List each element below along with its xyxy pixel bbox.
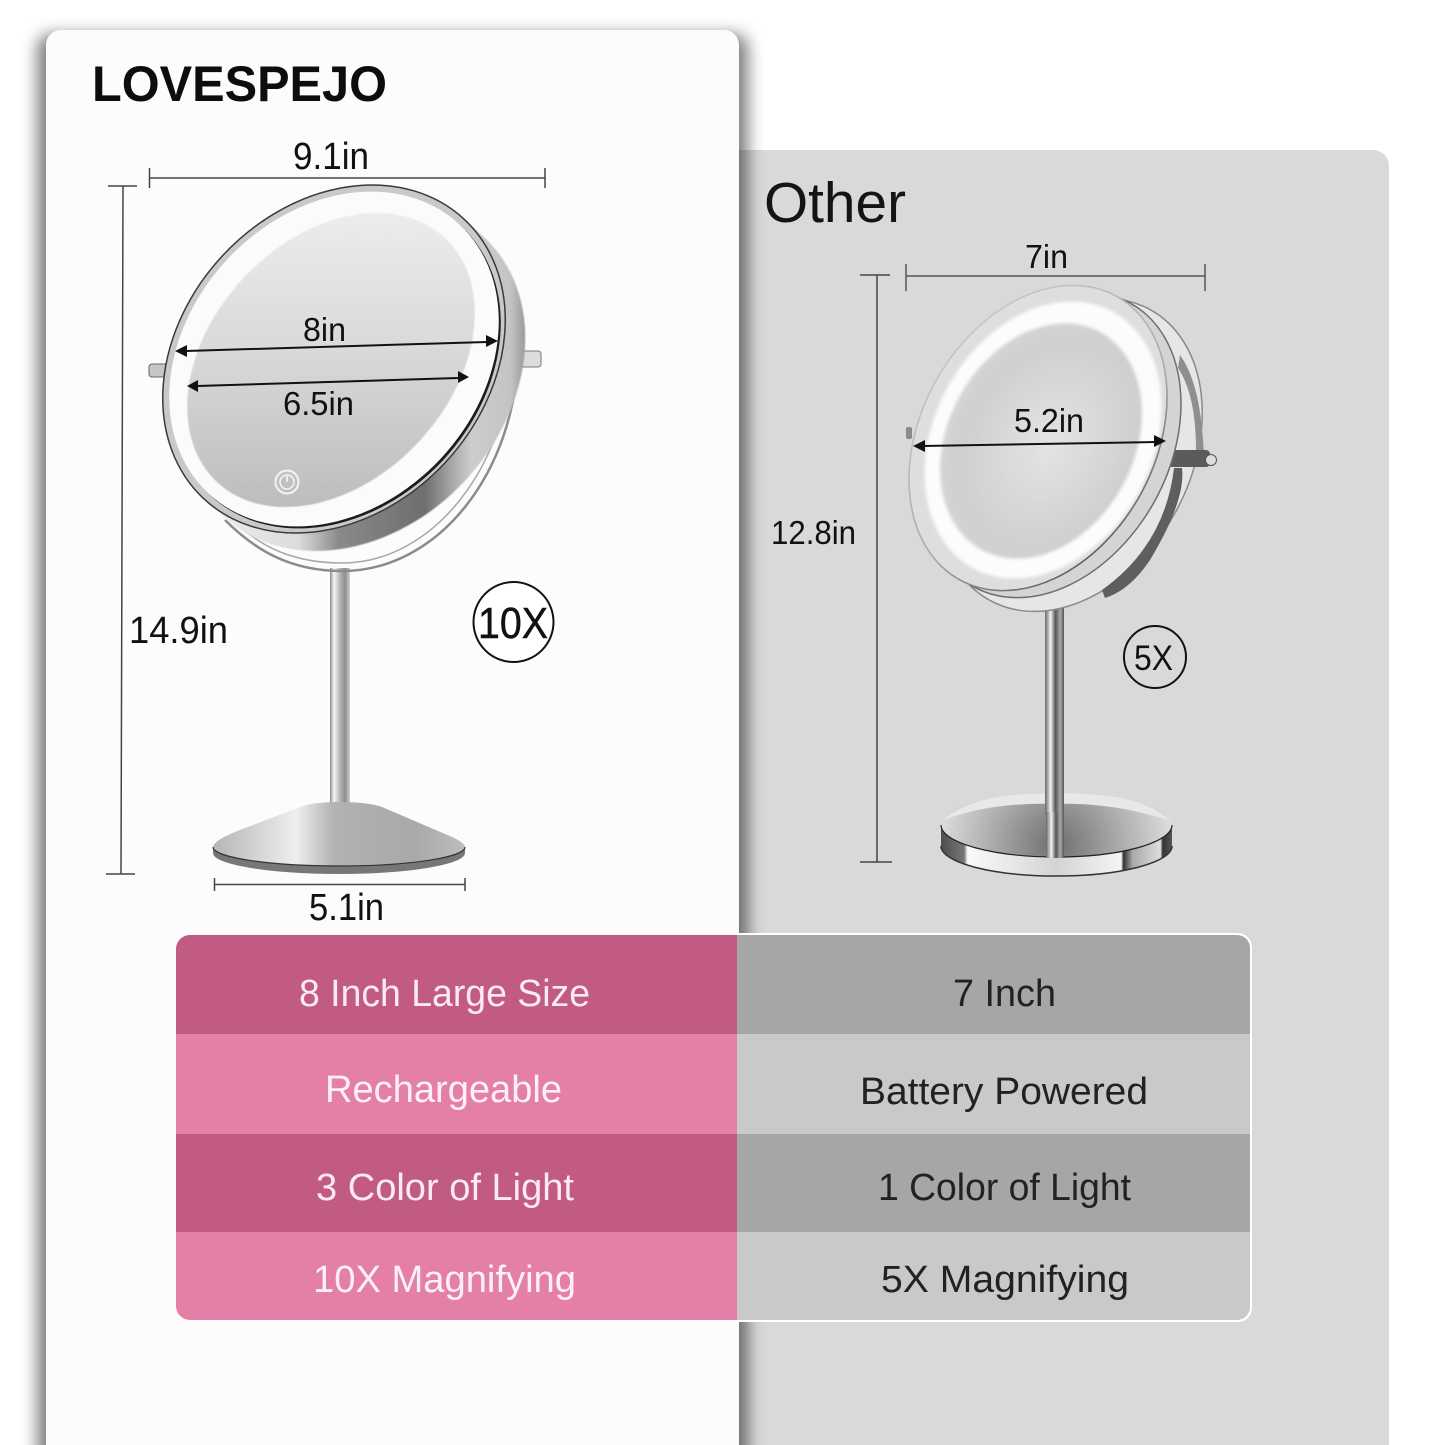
- table frame: [737, 933, 1252, 1322]
- row 4: [176, 1232, 1250, 1320]
- dimension: 7in width: [906, 238, 1205, 291]
- mirror: other: [857, 240, 1255, 876]
- rear disc: [885, 252, 1255, 658]
- heading: Other: Other: [764, 171, 906, 235]
- dimension: 5.2in: [913, 402, 1166, 452]
- power button: [276, 470, 298, 494]
- stem: [1045, 605, 1064, 815]
- row 4: 5X Magnifying: [881, 1259, 1129, 1301]
- dark crescent: [104, 127, 568, 595]
- row 1: 7 Inch: [953, 973, 1056, 1015]
- mirror glass: [129, 156, 533, 564]
- dimension: 9.1in width: [150, 136, 545, 188]
- mirror glass: [900, 288, 1182, 594]
- light ring: [878, 260, 1208, 620]
- dimension: 14.9in height: 14.9in: [129, 610, 228, 652]
- base: [213, 802, 465, 874]
- middle disc: [871, 247, 1233, 643]
- base: [941, 793, 1172, 876]
- dimension: 14.9in height: [106, 186, 228, 874]
- dimension: 6.5in: [187, 371, 469, 422]
- badge: 5X: 5X: [1134, 639, 1173, 678]
- row 2: [176, 1034, 1250, 1134]
- row 1: [176, 935, 1250, 1034]
- badge: 10X: [474, 582, 554, 662]
- row 3: [176, 1134, 1250, 1232]
- row 2: Battery Powered: [860, 1071, 1148, 1113]
- back housing: [113, 134, 595, 620]
- dimension: 8in: 8in: [303, 311, 346, 348]
- badge: 5X: [1124, 626, 1186, 688]
- row 3: 1 Color of Light: [878, 1167, 1131, 1209]
- dimension: 9.1in width: 9.1in: [293, 136, 369, 178]
- row 3: 3 Color of Light: [316, 1167, 574, 1209]
- dimension: 8in: [175, 311, 498, 357]
- pivot pins: [149, 364, 169, 377]
- stem: [330, 568, 350, 808]
- comparison table: [176, 933, 1252, 1322]
- dimension: 12.8in height: 12.8in: [771, 514, 856, 551]
- stand arc: [225, 352, 518, 571]
- mirror: LOVESPEJO: [93, 116, 595, 874]
- rear chrome strips: [1178, 355, 1204, 460]
- light ring: [102, 125, 566, 593]
- dimension: 7in width: 7in: [1025, 238, 1068, 275]
- dimension: 5.1in base: [214, 878, 465, 929]
- row 2: Rechargeable: [325, 1069, 562, 1111]
- dimension: 5.1in base: 5.1in: [309, 887, 384, 929]
- logo: LOVESPEJO: [92, 56, 387, 112]
- row 4: 10X Magnifying: [313, 1259, 576, 1301]
- panel shadow: [37, 34, 748, 1445]
- pivot pins: [906, 427, 912, 439]
- badge: 10X: 10X: [478, 599, 548, 648]
- dimension: 6.5in: 6.5in: [283, 385, 354, 422]
- mirror frame: [857, 240, 1219, 636]
- row 1: 8 Inch Large Size: [299, 973, 590, 1015]
- mirror frame: [93, 116, 575, 602]
- dimension: 5.2in: 5.2in: [1014, 402, 1084, 439]
- dimension: 12.8in height: [771, 275, 892, 862]
